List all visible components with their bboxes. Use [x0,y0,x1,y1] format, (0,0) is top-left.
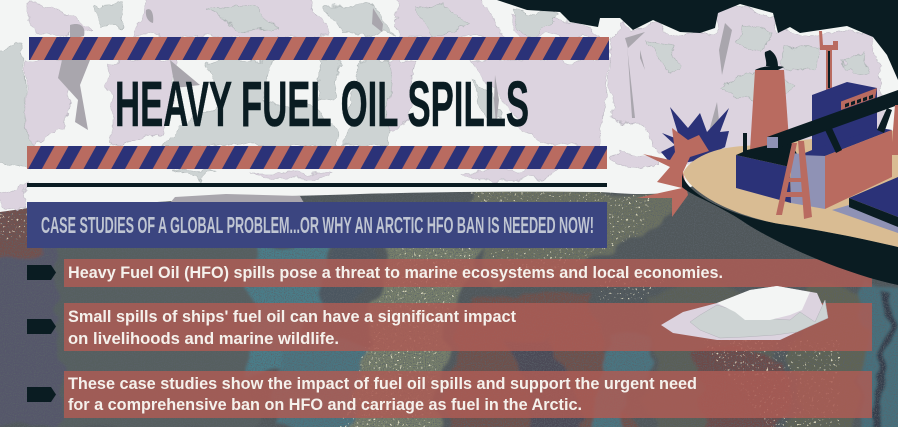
grey ice patches [0,2,868,180]
lower hatch [832,177,898,233]
bottom hazard stripe bar [27,146,607,169]
arrow bullet 2 [27,319,56,334]
row 3 text: These case studies show the impact of fuel oil spills and support the urgent need [68,374,697,393]
boom supports [825,108,892,153]
row 3 text: for a comprehensive ban on HFO and carriage as fuel in the Arctic. [68,395,582,414]
icon: explosion navy [661,107,729,165]
floating iceberg [661,286,828,340]
title: HEAVY FUEL OIL SPILLS [115,68,529,140]
right ladder [891,105,898,155]
ship [682,31,898,285]
icon: explosion salmon [637,128,709,217]
lavender wall [791,153,825,209]
heading rule [27,183,607,187]
navy upper body [800,128,892,156]
bullet row 1 [64,259,872,287]
background: sea ice field [0,0,898,212]
dark sky band [497,0,898,80]
top hazard stripe bar [29,37,609,60]
salmon wall [825,130,892,209]
subtitle banner [27,202,607,248]
mast [819,31,838,95]
background: marbled ocean [0,180,898,427]
lavender ice patches [0,0,885,210]
dark deck piece [736,133,800,167]
boom end [767,137,778,148]
arrow bullet 1 [27,265,56,280]
row 1 text: Heavy Fuel Oil (HFO) spills pose a threat to marine ecosystems and local economies. [68,263,723,282]
bullet row 2 [64,303,872,351]
bridge tower [812,82,877,155]
funnel [750,70,789,150]
row 2 text: on livelihoods and marine wildlife. [68,329,339,348]
navy hatch block [736,155,791,203]
crane boom [767,90,898,148]
hull [682,173,898,285]
dark grey ice [58,8,732,203]
bullet row 3 [64,371,872,418]
arrow bullet 3 [27,387,56,402]
window strip [841,88,877,110]
ladder [776,141,812,219]
deck [683,130,898,247]
row 2 text: Small spills of ships' fuel oil can have a significant impact [68,307,516,326]
funnel smoke [755,50,784,70]
